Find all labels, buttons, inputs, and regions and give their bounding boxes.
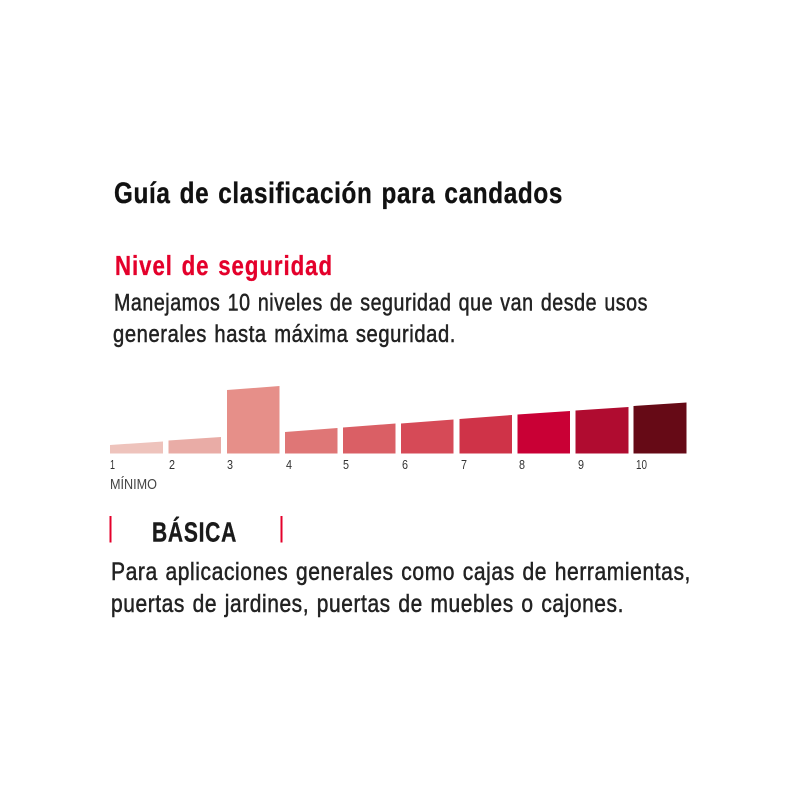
axis labels: 10 — [636, 457, 647, 472]
bar level 8 — [518, 411, 570, 454]
marker: left tick — [110, 516, 112, 542]
bar level 4 — [285, 428, 338, 454]
bar level 2 — [168, 437, 221, 454]
text block: intro: Manejamos 10 niveles de seguridad que van desde usos — [114, 290, 648, 316]
bar level 3 — [227, 386, 280, 454]
text block: intro — [113, 290, 648, 348]
label: mínimo: MÍNIMO — [110, 476, 157, 493]
marker: right tick — [280, 516, 282, 542]
title: Guía de clasificación para candados — [114, 177, 563, 210]
axis labels: 7 — [461, 457, 467, 472]
bar level 1 — [110, 442, 163, 454]
bar level 9 — [576, 407, 628, 454]
axis labels: 9 — [578, 457, 584, 472]
axis labels: 6 — [402, 457, 408, 472]
text block: description: Para aplicaciones generales como cajas de herramientas, — [111, 558, 691, 586]
axis labels: 8 — [519, 457, 525, 472]
bar level 6 — [401, 420, 454, 454]
bar chart: security levels — [110, 386, 686, 454]
text block: description — [111, 558, 691, 618]
bar level 5 — [343, 424, 396, 454]
heading: básica: BÁSICA — [152, 516, 237, 548]
axis labels: 4 — [286, 457, 292, 472]
axis labels: 5 — [343, 457, 349, 472]
text block: description: puertas de jardines, puertas de muebles o cajones. — [111, 590, 624, 618]
axis labels: 1 — [110, 457, 115, 472]
text block: intro: generales hasta máxima seguridad. — [113, 321, 456, 348]
heading: nivel de seguridad: Nivel de seguridad — [115, 250, 333, 281]
bar level 10 — [634, 402, 686, 454]
bar level 7 — [460, 415, 512, 454]
axis labels: 2 — [169, 457, 175, 472]
axis labels: 3 — [227, 457, 233, 472]
axis labels — [110, 457, 647, 472]
